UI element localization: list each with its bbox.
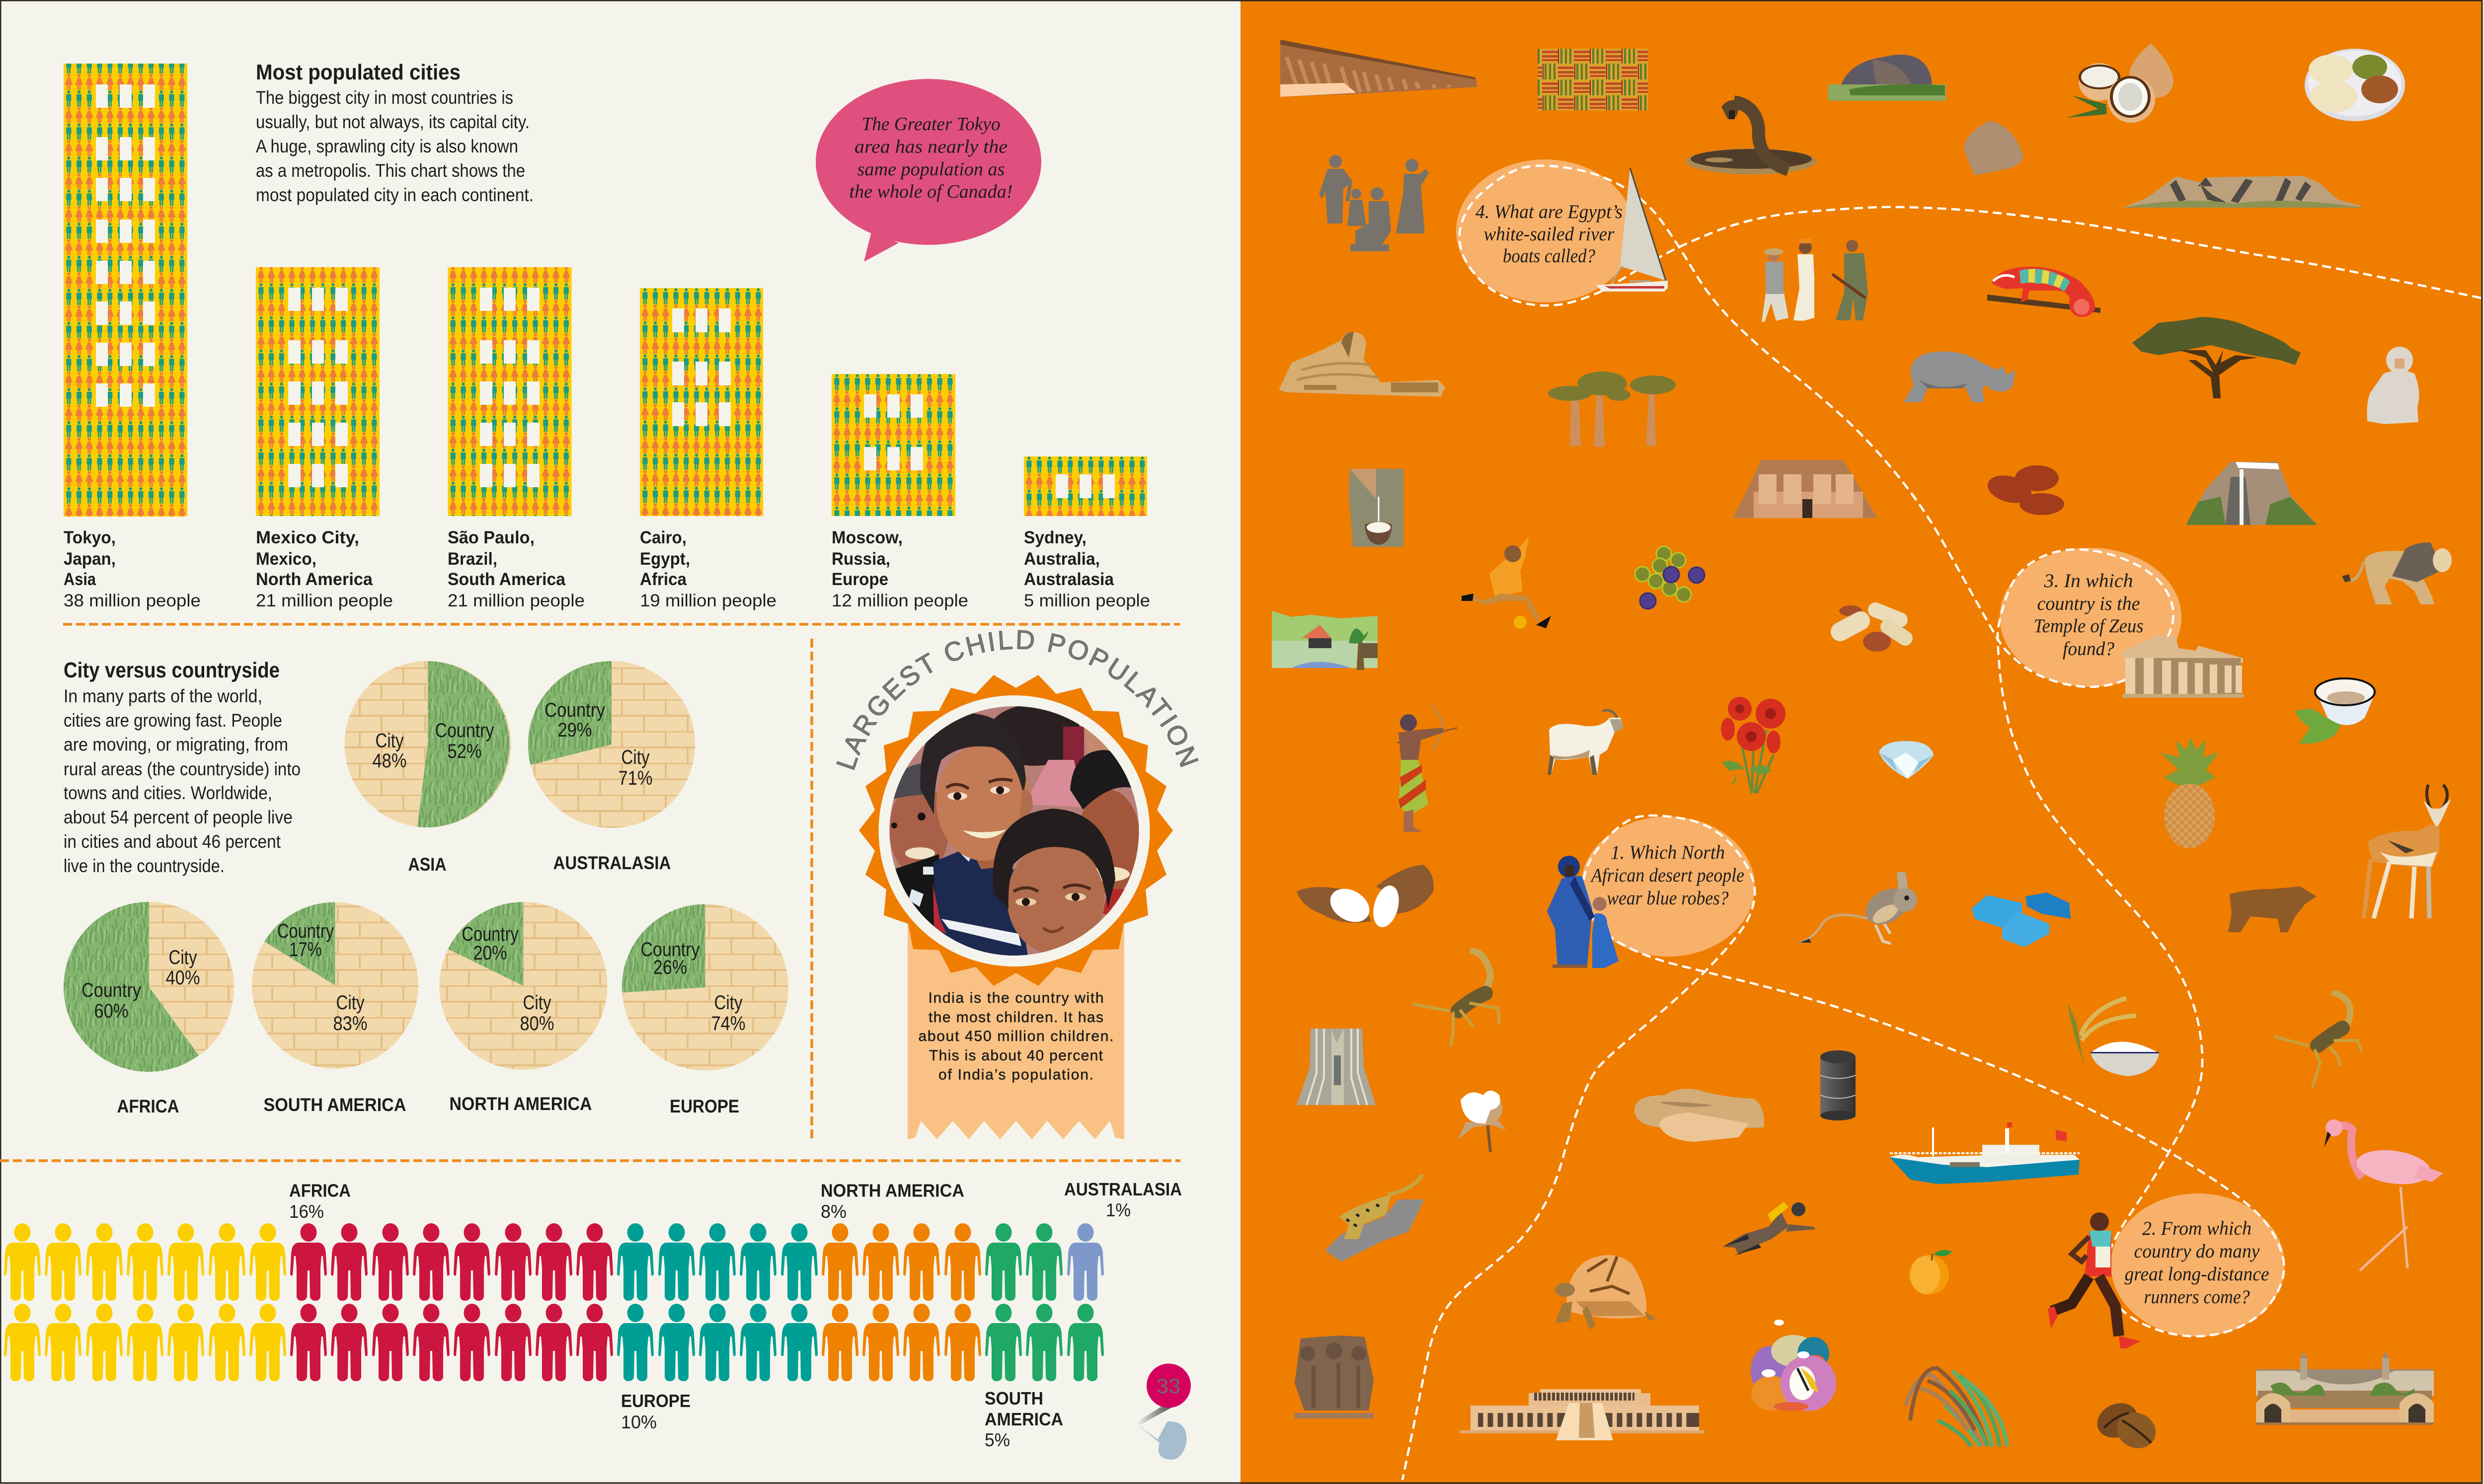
label: Tokyo: Japan, (64, 549, 116, 569)
ribbon with India text: This is about 40 percent (929, 1047, 1103, 1064)
label: Sydney: 5 million people (1024, 591, 1150, 610)
question text 1: wear blue robes? (1607, 888, 1729, 909)
text block: migration intro: rural areas (the countryside) into (64, 759, 301, 779)
icon: jerboa (1799, 872, 1917, 944)
icon: horned viper (1634, 1089, 1764, 1142)
question text 3: 3. In which (2043, 570, 2133, 592)
icon: runner (2048, 1212, 2140, 1348)
pie chart: Asia (345, 661, 511, 875)
label: North America 8% (821, 1180, 964, 1222)
icon: springbok (2364, 785, 2451, 918)
chart bar: Tokyo building (64, 64, 187, 517)
text block: migration intro: cities are growing fast. People (64, 710, 282, 731)
text block: cities intro: most populated city in each continent. (256, 185, 534, 205)
pie chart: Europe (622, 904, 788, 1116)
question text 2: great long-distance (2124, 1263, 2269, 1285)
icon: rice bowl (2068, 998, 2159, 1076)
text block: cities intro: A huge, sprawling city is also known (256, 136, 518, 156)
label: Sydney: Australia, (1024, 549, 1100, 569)
icon: blue stones (1971, 892, 2071, 947)
pie chart: Europe: City (714, 992, 742, 1014)
callout: Greater Tokyo speech bubble (816, 79, 1041, 262)
label: Africa 16%: 16% (289, 1201, 324, 1222)
panel: orange map page (1241, 0, 2483, 1484)
question text 2: country do many (2134, 1241, 2260, 1262)
icon: goat (1548, 710, 1623, 775)
pie chart: Asia: ASIA (408, 854, 446, 875)
heading: largest child population on arc: LARGEST CHILD POPULATION (836, 630, 1198, 770)
ribbon with India text: about 450 million children. (918, 1028, 1114, 1044)
icon: table mountain (2122, 176, 2364, 208)
icon: lion (2342, 542, 2452, 604)
pie chart: Asia: 48% (373, 750, 406, 772)
label: Africa 16% (289, 1180, 351, 1222)
label: North America 8%: 8% (821, 1201, 847, 1222)
label: South America 5%: SOUTH (985, 1388, 1043, 1409)
label: Europe 10%: EUROPE (621, 1391, 691, 1411)
label: Sao Paulo: Brazil, (448, 549, 497, 569)
chart bar: Cairo building (640, 288, 763, 516)
people: Asia yellow (unlabelled) (4, 1223, 286, 1381)
label: Sao Paulo: 21 million people (448, 591, 585, 610)
text block: cities intro: usually, but not always, its capital city. (256, 112, 530, 132)
text block: migration intro: are moving, or migrating, from (64, 734, 288, 755)
question text 2: runners come? (2144, 1286, 2250, 1308)
chart bar: Moscow building (832, 374, 955, 516)
icon: cargo ship (1890, 1122, 2080, 1184)
label: Mexico City: 21 million people (256, 591, 393, 610)
pie chart: South America: City (336, 992, 365, 1014)
label: Australasia 1%: 1% (1106, 1200, 1131, 1220)
label: Sydney: Australasia (1024, 570, 1114, 589)
quiz bubble 2 (2111, 1193, 2285, 1336)
pie chart: North America (439, 902, 607, 1114)
label: Tokyo (64, 528, 201, 610)
text block: migration intro: about 54 percent of people live (64, 807, 293, 827)
icon: plate of food (2305, 49, 2405, 121)
label: Moscow (832, 528, 968, 610)
icon: page number pin 33: 33 (1157, 1374, 1180, 1398)
icon: cobra (1686, 100, 1816, 174)
pie chart: Africa: AFRICA (117, 1096, 179, 1116)
pie chart: Australasia: 29% (557, 719, 592, 741)
icon: baobab trees (1548, 371, 1676, 447)
pie chart: North America: Country (462, 923, 519, 945)
pie chart: Africa: 40% (166, 967, 200, 989)
label: Sao Paulo: São Paulo, (448, 528, 535, 547)
icon: peanuts (1839, 605, 1905, 652)
icon: monkey (2367, 347, 2419, 424)
icon: rock (1964, 121, 2023, 175)
icon: grass tuft (1905, 1368, 2007, 1446)
label: Moscow: 12 million people (832, 591, 968, 610)
pie chart: South America: SOUTH AMERICA (263, 1095, 406, 1115)
label: Tokyo: Asia (64, 570, 96, 589)
label: Europe 10%: 10% (621, 1412, 657, 1432)
icon: red roses (1721, 697, 1785, 793)
icon: dates (1985, 465, 2064, 515)
pie chart: Australasia: AUSTRALASIA (553, 853, 671, 873)
icon: diamond (1879, 741, 1934, 779)
icon: Temple of Zeus (2122, 635, 2244, 698)
label: Mexico City: North America (256, 570, 373, 589)
icon: lake village scene (1272, 611, 1378, 668)
pie chart: Australasia: City (621, 746, 650, 768)
question text 3 (2034, 570, 2143, 660)
photo: children of India (illustrated) (889, 704, 1141, 959)
pie chart: South America (252, 902, 418, 1115)
chart bar: Mexico City building (256, 267, 380, 516)
icon: oil barrel (1820, 1050, 1856, 1120)
ribbon with India text: the most children. It has (929, 1009, 1103, 1026)
icon: cow (2228, 887, 2317, 932)
panel: city versus countryside (64, 658, 788, 1116)
text block: migration intro: In many parts of the world, (64, 686, 262, 706)
pie chart: South America: Country (277, 920, 334, 942)
text block: migration intro: in cities and about 46 percent (64, 831, 281, 852)
label: Moscow: Moscow, (832, 528, 903, 547)
question text 4: 4. What are Egypt’s (1475, 201, 1623, 223)
panel: most populated cities (64, 60, 1150, 610)
question text 1: 1. Which North (1611, 842, 1725, 863)
people: Australasia blue (1067, 1223, 1104, 1301)
pie chart: Africa: Country (81, 979, 141, 1001)
label: Cairo (640, 528, 776, 610)
icon: Union Buildings (2256, 1351, 2434, 1425)
label: Europe 10% (621, 1391, 691, 1432)
icon: Abu Simbel temple (1733, 460, 1877, 518)
pie chart: Europe: Country (641, 939, 699, 961)
label: Cairo: Cairo, (640, 528, 687, 547)
label: Sao Paulo (448, 528, 585, 610)
chart bar: Sao Paulo building (448, 267, 571, 516)
question text 2 (2124, 1218, 2269, 1308)
icon: Tuareg man and child (1547, 856, 1619, 968)
question text 3: Temple of Zeus (2034, 615, 2143, 637)
chart bar: Sydney building (1024, 456, 1147, 516)
question text 1: African desert people (1590, 865, 1744, 886)
people: South America green (985, 1223, 1104, 1381)
label: Moscow: Russia, (832, 549, 890, 569)
icon: archer (1397, 705, 1457, 832)
icon: rubber tree tapping (1349, 469, 1403, 547)
quiz bubble 1 (1581, 816, 1755, 957)
label: Mexico City (256, 528, 393, 610)
icon: beads (1635, 546, 1705, 609)
icon: felucca boat (1596, 168, 1668, 292)
icon: waterfall mountain (2186, 462, 2317, 525)
icon: tower monument (1297, 1029, 1376, 1105)
question text 2: 2. From which (2142, 1218, 2251, 1239)
icon: Hatshepsut temple (1460, 1389, 1705, 1440)
callout: Greater Tokyo speech bubble: area has nearly the (854, 136, 1008, 157)
icon: footballer (1462, 536, 1551, 629)
pie chart: South America: 83% (333, 1013, 368, 1035)
text block: migration intro: live in the countryside. (64, 856, 225, 876)
icon: kente cloth (1538, 49, 1648, 110)
label: Australasia 1% (1064, 1179, 1182, 1220)
question text 4 (1475, 201, 1623, 267)
starburst rosette (859, 675, 1173, 986)
people: North America orange (822, 1223, 981, 1381)
pie chart: North America: NORTH AMERICA (449, 1094, 592, 1114)
callout: Greater Tokyo speech bubble: same population as (857, 159, 1005, 180)
text block: migration intro: towns and cities. Worldwide, (64, 783, 272, 803)
text block: cities intro: as a metropolis. This chart shows the (256, 160, 525, 181)
label: Mexico City: Mexico, (256, 549, 316, 569)
icon: sphinx (1279, 332, 1445, 397)
icon: flamingo (2324, 1119, 2443, 1270)
quiz bubble 4 (1456, 159, 1634, 302)
icon: tortoise (1555, 1255, 1656, 1330)
chart: world population people row (4, 1179, 1182, 1450)
label: Moscow: Europe (832, 570, 888, 589)
label: North America 8%: NORTH AMERICA (821, 1180, 964, 1201)
question text 1 (1590, 842, 1744, 909)
ribbon with India text (908, 921, 1124, 1139)
pie chart: Europe: 74% (711, 1013, 745, 1035)
icon: acacia tree (2132, 317, 2301, 398)
icon: rhino (1904, 352, 2016, 402)
pie chart: Australasia: Country (544, 699, 605, 721)
icon: coral reef with fish (1751, 1320, 1836, 1411)
icon: bronze plaque (1295, 1336, 1374, 1418)
label: South America 5%: 5% (985, 1430, 1010, 1450)
label: Africa 16%: AFRICA (289, 1180, 351, 1201)
icon: leopard on branch (1325, 1175, 1424, 1261)
icon: chameleon (1987, 267, 2100, 317)
question text 4: white-sailed river (1483, 223, 1615, 245)
question text 3: country is the (2037, 593, 2140, 614)
pie chart: Europe: 26% (653, 957, 687, 978)
text block: migration intro (64, 686, 301, 876)
pie chart: Asia: City (376, 730, 403, 752)
panel: largest child population badge (836, 630, 1198, 1139)
question text 4: boats called? (1503, 245, 1595, 267)
pie chart: Asia: Country (435, 720, 494, 742)
pie chart: Africa: City (169, 947, 197, 968)
label: Sydney (1024, 528, 1150, 610)
callout: Greater Tokyo speech bubble: The Greater Tokyo (861, 114, 1001, 135)
pie chart: Asia: 52% (447, 741, 482, 762)
quiz bubble 3 (2000, 548, 2181, 687)
text block: cities intro (256, 87, 534, 205)
icon: pineapple (2160, 738, 2219, 848)
label: Mexico City: Mexico City, (256, 528, 359, 547)
icon: scorpion (right) (2276, 993, 2361, 1086)
pie chart: Africa (64, 902, 234, 1116)
label: Australasia 1%: AUSTRALASIA (1064, 1179, 1182, 1199)
icon: rock mountain with grass (1828, 55, 1946, 101)
page background: left cream panel (0, 0, 1241, 1484)
heading: most populated cities: Most populated cities (256, 60, 461, 84)
label: South America 5% (985, 1388, 1063, 1450)
question text 3: found? (2063, 638, 2114, 660)
icon: statues (1319, 155, 1429, 251)
people: Europe teal (617, 1223, 818, 1381)
label: Cairo: Egypt, (640, 549, 690, 569)
pie chart: Europe: EUROPE (670, 1096, 739, 1116)
pie chart: North America: 80% (520, 1013, 554, 1035)
label: Tokyo: 38 million people (64, 591, 201, 610)
callout: Greater Tokyo speech bubble: the whole of Canada! (850, 181, 1012, 202)
icon: tea cup (2295, 678, 2376, 743)
icon: cotton boll (1458, 1091, 1506, 1152)
pie chart: South America: 17% (289, 939, 322, 961)
icon: page number pin 33 (1137, 1364, 1191, 1460)
label: Tokyo: Tokyo, (64, 528, 116, 547)
icon: scorpion (left) (1413, 951, 1499, 1045)
icon: cassava (1297, 865, 1434, 930)
icon: three safari people (1762, 238, 1868, 322)
label: Cairo: Africa (640, 570, 687, 589)
icon: orange fruit (1909, 1250, 1952, 1295)
dashed route line (1402, 166, 2481, 1480)
text block: cities intro: The biggest city in most countries is (256, 87, 513, 108)
icon: coffee beans (2092, 1397, 2162, 1455)
people: Africa red (290, 1223, 613, 1381)
label: Cairo: 19 million people (640, 591, 776, 610)
pie chart: North America: 20% (473, 942, 507, 964)
icon: coconuts (2066, 43, 2174, 123)
heading: city versus countryside: City versus countryside (64, 658, 280, 682)
pie chart: Australasia: 71% (618, 767, 653, 789)
pie chart: North America: City (523, 992, 551, 1014)
ribbon with India text: of India’s population. (938, 1067, 1093, 1083)
label: South America 5%: AMERICA (985, 1409, 1063, 1429)
pie chart: Australasia (528, 661, 695, 873)
label: Sydney: Sydney, (1024, 528, 1087, 547)
white ring (878, 695, 1150, 966)
pie chart: Africa: 60% (94, 1000, 128, 1022)
icon: dam (1280, 40, 1477, 97)
label: Sao Paulo: South America (448, 570, 566, 589)
icon: scuba diver (1723, 1202, 1816, 1255)
ribbon with India text: India is the country with (928, 990, 1104, 1006)
